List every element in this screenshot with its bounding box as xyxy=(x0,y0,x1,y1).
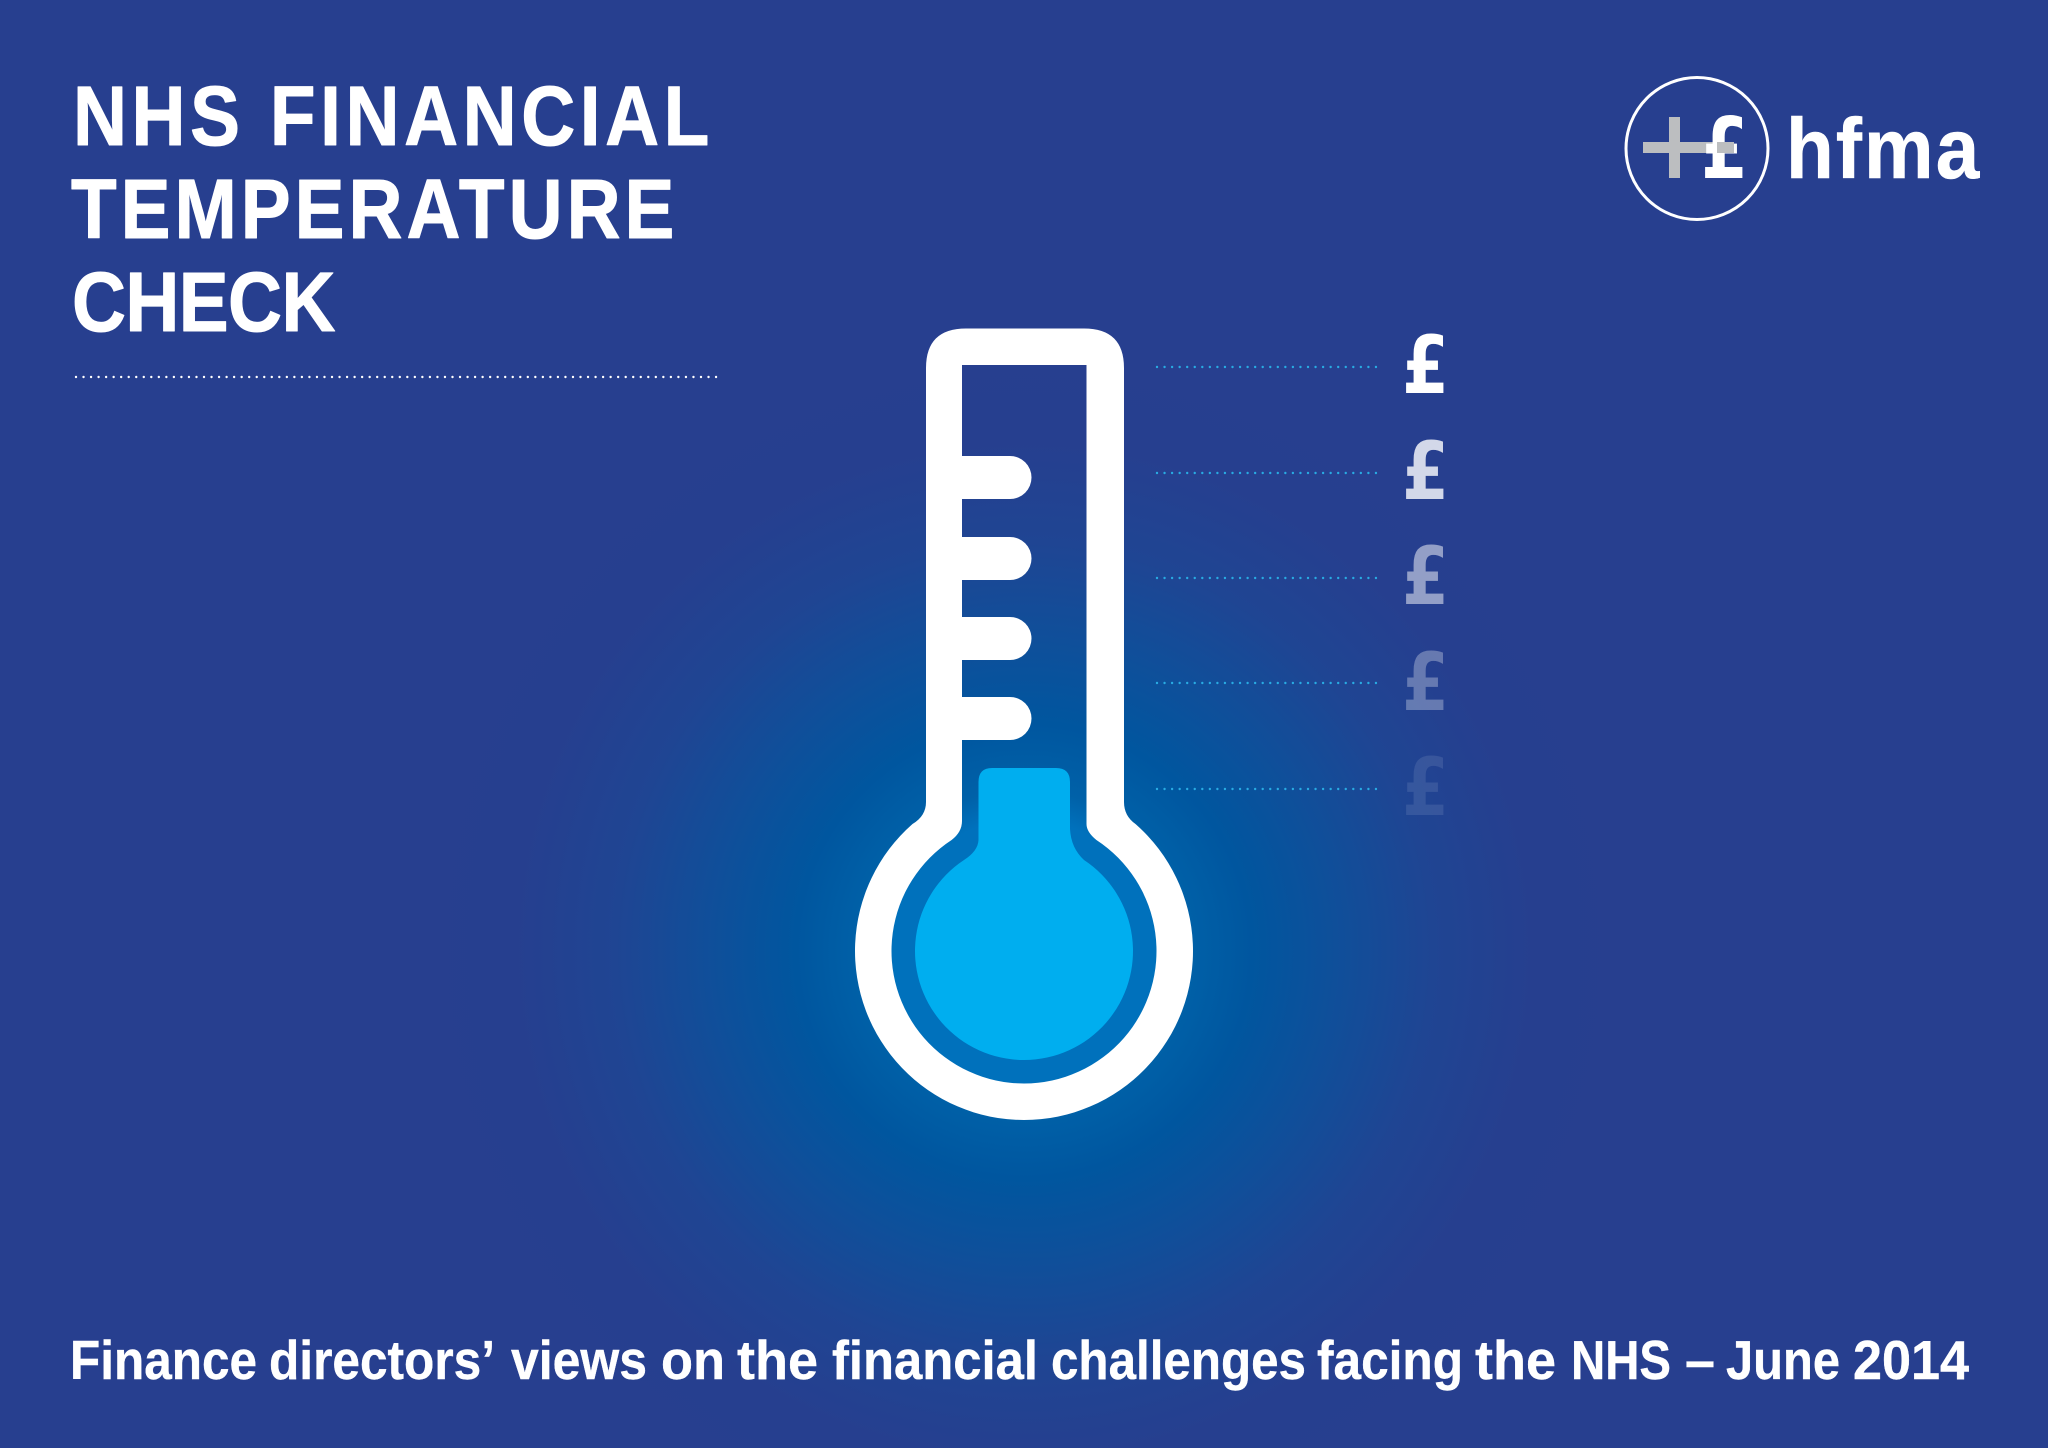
scale: fading pound signs: £ xyxy=(1402,425,1449,518)
logo pound sign: £ xyxy=(1701,100,1748,199)
logo: hfma xyxy=(1626,78,1980,220)
subtitle: 2014 xyxy=(1853,1329,1969,1391)
subtitle: the xyxy=(1475,1329,1556,1391)
subtitle: the xyxy=(737,1329,818,1391)
scale: fading pound signs: £ xyxy=(1402,636,1449,729)
scale: fading pound signs: £ xyxy=(1402,530,1449,623)
scale: fading pound signs: £ xyxy=(1402,319,1449,412)
logo plus sign xyxy=(1643,117,1734,178)
scale: fading pound signs xyxy=(1402,319,1449,834)
scale: fading pound signs: £ xyxy=(1402,741,1449,834)
thermometer outline xyxy=(855,328,1193,1120)
title xyxy=(71,69,709,349)
thermometer tick marks xyxy=(960,456,1032,740)
logo wordmark: hfma xyxy=(1786,102,1980,197)
subtitle: Finance xyxy=(70,1329,257,1391)
subtitle: challenges xyxy=(1051,1329,1306,1391)
title: TEMPERATURE xyxy=(71,162,674,256)
title: CHECK xyxy=(72,255,335,349)
subtitle: NHS xyxy=(1571,1329,1671,1391)
subtitle xyxy=(70,1329,1969,1391)
thermometer liquid xyxy=(915,768,1133,1060)
subtitle: – xyxy=(1685,1329,1715,1391)
subtitle: on xyxy=(661,1329,725,1391)
subtitle: financial xyxy=(832,1329,1038,1391)
logo pound crossbar xyxy=(1717,142,1734,153)
thermometer xyxy=(855,328,1193,1120)
subtitle: June xyxy=(1726,1329,1840,1391)
logo circle xyxy=(1626,78,1768,220)
title: NHS FINANCIAL xyxy=(73,69,709,163)
subtitle: facing xyxy=(1317,1329,1463,1391)
subtitle: views xyxy=(511,1329,647,1391)
subtitle: directors’ xyxy=(269,1329,495,1391)
title divider dotted line xyxy=(76,376,719,378)
scale: dotted lines xyxy=(1157,367,1381,789)
